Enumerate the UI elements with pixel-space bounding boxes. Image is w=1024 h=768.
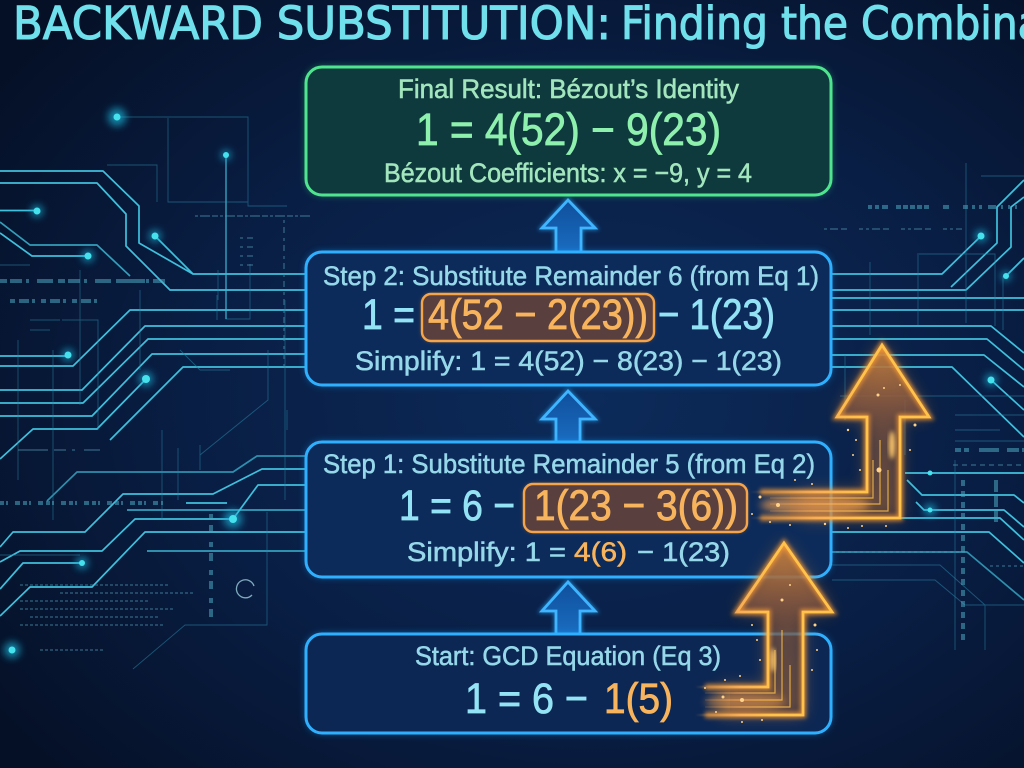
- panel: step 2: [306, 252, 831, 385]
- equation: step 2: 4(52 − 2(23)): [428, 291, 648, 339]
- circuit board traces: right: [824, 163, 1024, 650]
- text: step 1 simplify: 4(6): [574, 537, 627, 567]
- arrow: orange, from Step 1 highlight up to Step 2: [750, 345, 929, 529]
- equation: start: 1(5): [604, 675, 673, 723]
- text: step 2 simplify: Simplify: 1 = 4(52) − 8(23) − 1(23): [355, 346, 782, 376]
- equation: step 1: [399, 482, 747, 532]
- equation: step 2: − 1(23): [658, 291, 775, 339]
- circuit board traces: left: [0, 117, 310, 669]
- panel: start: [306, 634, 831, 733]
- equation: step 2: [362, 291, 775, 341]
- heading: final result: Final Result: Bézout’s Identity: [398, 74, 739, 104]
- equation: final result: 1 = 4(52) − 9(23): [416, 104, 721, 155]
- arrow: blue, Start to Step 1: [542, 582, 595, 634]
- arrow: blue, Step 2 to Final: [542, 200, 595, 253]
- text: Bézout coefficients: Bézout Coefficients: x = −9, y = 4: [384, 158, 752, 188]
- arrow: blue, Step 1 to Step 2: [542, 391, 595, 443]
- heading: start: Start: GCD Equation (Eq 3): [415, 641, 721, 671]
- arrow: orange, from Start equation up to Step 1: [695, 543, 832, 723]
- equation: start: 1 = 6 −: [465, 675, 588, 723]
- heading: step 2: Step 2: Substitute Remainder 6 (from Eq 1): [323, 261, 819, 291]
- panel: step 1: [306, 442, 831, 577]
- text: step 1 simplify: [407, 537, 730, 567]
- text: step 1 simplify: Simplify: 1 =: [407, 537, 566, 567]
- title: [13, 0, 1024, 50]
- equation: step 1: 1(23 − 3(6)): [534, 482, 738, 530]
- text: step 1 simplify: − 1(23): [637, 537, 730, 567]
- icon: small circular glyph: [236, 580, 254, 598]
- glowing circuit nodes: [4, 108, 1011, 658]
- equation: start: [465, 675, 673, 723]
- equation: step 2: 1 =: [362, 291, 415, 339]
- heading: step 1: Step 1: Substitute Remainder 5 (from Eq 2): [323, 449, 815, 479]
- panel: final result: [306, 67, 831, 195]
- equation: step 1: 1 = 6 −: [399, 482, 515, 530]
